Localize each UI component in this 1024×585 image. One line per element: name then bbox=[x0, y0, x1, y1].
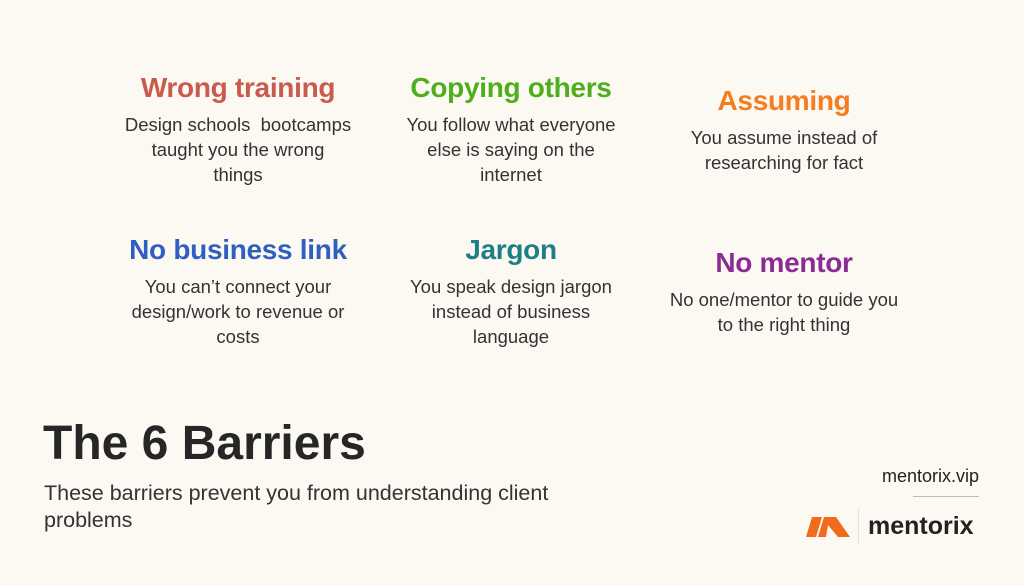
panel: assuming: Assuming bbox=[718, 85, 850, 116]
panel: wrong training: Design schools bootcamps bbox=[125, 114, 351, 135]
panel: assuming: researching for fact bbox=[705, 152, 863, 173]
panel: copying others: Copying others bbox=[410, 72, 612, 103]
panel: jargon bbox=[410, 234, 612, 347]
panel: wrong training: taught you the wrong bbox=[152, 139, 324, 160]
panel: copying others bbox=[406, 72, 616, 185]
panel: wrong training: Wrong training bbox=[141, 72, 335, 103]
logo bbox=[806, 508, 974, 544]
panel: jargon: instead of business bbox=[432, 301, 590, 322]
icon: logo mark bbox=[806, 517, 850, 537]
panel: no mentor: to the right thing bbox=[718, 314, 850, 335]
panel: copying others: You follow what everyone bbox=[406, 114, 616, 135]
panel: jargon: Jargon bbox=[465, 234, 557, 265]
panel: jargon: You speak design jargon bbox=[410, 276, 612, 297]
panel: no business link: design/work to revenue or bbox=[132, 301, 344, 322]
panel: wrong training bbox=[125, 72, 351, 185]
panel: wrong training: things bbox=[213, 164, 263, 185]
subtitle bbox=[44, 481, 548, 532]
panel: no mentor: No one/mentor to guide you bbox=[670, 289, 898, 310]
logo text: mentorix bbox=[868, 512, 974, 540]
panel: no business link: costs bbox=[216, 326, 260, 347]
panel: no business link bbox=[129, 234, 348, 347]
panel: copying others: else is saying on the bbox=[427, 139, 595, 160]
panel: no mentor: No mentor bbox=[715, 247, 853, 278]
title: The 6 Barriers bbox=[43, 417, 366, 470]
subtitle: problems bbox=[44, 508, 132, 532]
panel: no business link: You can’t connect your bbox=[145, 276, 331, 297]
panel: jargon: language bbox=[473, 326, 549, 347]
panel: assuming: You assume instead of bbox=[691, 127, 877, 148]
subtitle: These barriers prevent you from understanding client bbox=[44, 481, 548, 505]
panel: assuming bbox=[691, 85, 878, 173]
panel: no mentor bbox=[670, 247, 898, 335]
website: mentorix.vip bbox=[882, 466, 979, 486]
panel: no business link: No business link bbox=[129, 234, 347, 265]
panel: copying others: internet bbox=[480, 164, 542, 185]
